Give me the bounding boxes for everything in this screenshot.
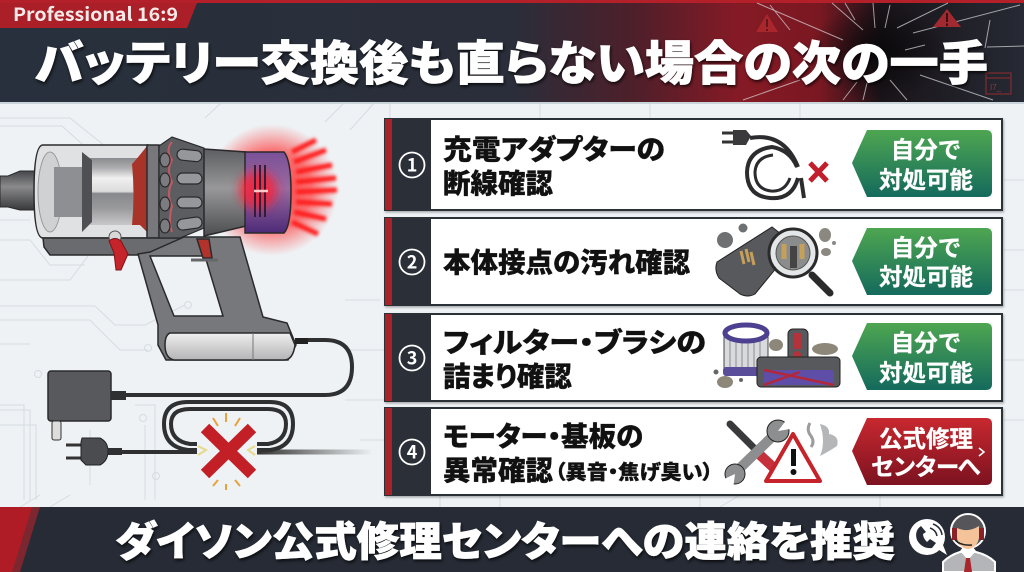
badge: self-fix: 対処可能: [879, 354, 973, 388]
icon: tools and warning: [722, 415, 838, 489]
panel: step 1: [385, 119, 1002, 210]
icon: support agent: [943, 514, 995, 572]
badge: self-fix: 自分で: [891, 324, 961, 358]
step 4 text: モーター・基板の: [443, 414, 643, 454]
step 4 text: （異音・焦げ臭い）: [555, 456, 713, 485]
step 1 text: [443, 127, 665, 201]
warning icon left: [756, 14, 778, 32]
number 3: 3: [407, 344, 417, 370]
number 2: [400, 248, 424, 274]
panel: step 2: [385, 218, 1002, 305]
badge: self-fix: 自分で: [891, 131, 961, 165]
number 1: [400, 152, 424, 178]
icon: filter and brush: [714, 325, 840, 388]
footer text: ダイソン公式修理センターへの連絡を推奨: [115, 508, 895, 568]
panel: step 3: [385, 314, 1002, 401]
illustration: cordless vacuum with red glow: [0, 124, 373, 490]
badge: official repair center: 公式修理: [879, 420, 973, 454]
red glow: [206, 124, 338, 256]
step 4 text: 異常確認: [443, 448, 553, 488]
icon: broken cable: [722, 130, 827, 198]
power plug: [66, 438, 122, 465]
footer band: [0, 507, 1024, 572]
step 2 text: 本体接点の汚れ確認: [443, 240, 691, 280]
looped broken cord: [122, 402, 373, 452]
dust bin: [34, 145, 159, 238]
badge: official repair center: [852, 418, 992, 485]
AC adapter: [48, 371, 126, 440]
terminal icon: I7_: [990, 83, 1002, 92]
purple end cap with vents: [239, 152, 291, 233]
handle and battery: [138, 237, 296, 360]
step 4 text: [443, 414, 713, 488]
badge: self-fix: [852, 323, 992, 390]
charger cord: [126, 340, 352, 395]
number 4: 4: [407, 438, 418, 464]
red X with sparks: [198, 413, 255, 490]
motor body: [204, 149, 246, 236]
badge: self-fix: 対処可能: [879, 161, 973, 195]
cyclone: [159, 137, 204, 238]
badge: self-fix: [852, 228, 992, 295]
step 3 text: フィルター・ブラシの: [443, 320, 706, 360]
badge: self-fix: 対処可能: [879, 258, 973, 292]
panel: step 4: [385, 408, 1002, 495]
header band: [0, 0, 1024, 104]
step 1 text: 充電アダプターの: [443, 127, 665, 167]
icon: phone bubble: [909, 519, 947, 555]
number 1: 1: [407, 152, 417, 178]
step 3 text: 詰まり確認: [443, 354, 572, 394]
warning icon right: [933, 9, 961, 27]
badge: self-fix: 自分で: [891, 229, 961, 263]
terminal icon: [986, 73, 1011, 94]
number 2: 2: [407, 248, 417, 274]
icon: contact inspection: [716, 224, 836, 296]
step 3 text: [443, 320, 706, 394]
step 1 text: 断線確認: [443, 161, 553, 201]
cracked glass decoration: [743, 3, 1024, 100]
title: バッテリー交換後も直らない場合の次の一手: [35, 25, 988, 94]
wand: [0, 171, 38, 210]
number 4: [400, 438, 424, 464]
badge: official repair center: センターへ: [871, 448, 981, 482]
number 3: [400, 344, 424, 370]
lower body and red latch: [43, 231, 184, 270]
badge: self-fix: [852, 130, 992, 197]
tag: Professional 16:9: Professional 16:9: [13, 1, 178, 27]
